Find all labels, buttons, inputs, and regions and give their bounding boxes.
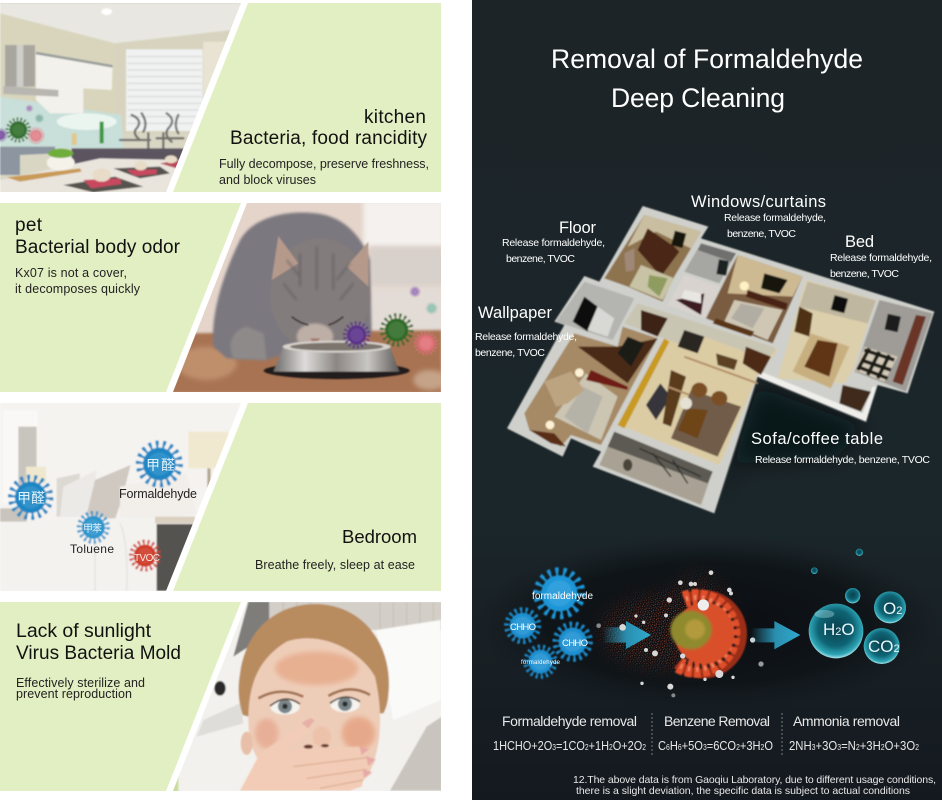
dark background xyxy=(472,0,942,800)
title line 1: Removal of Formaldehyde xyxy=(551,44,863,74)
panel: kitchen xyxy=(0,0,441,193)
label: formaldehyde small: formaldehyde xyxy=(521,660,561,666)
label: floor heading: Floor xyxy=(559,219,596,237)
panel: bedroom xyxy=(0,400,441,593)
hallway and living room xyxy=(618,303,778,465)
callout: sofa and coffee table xyxy=(751,430,930,466)
icon: white particles xyxy=(596,570,764,697)
icon: decomposing red virus xyxy=(670,595,742,673)
equation: benzene: C6H6+5O3=6CO2+3H2O xyxy=(658,738,773,753)
label: Formaldehyde: Formaldehyde xyxy=(119,487,197,501)
panel: pet xyxy=(0,200,447,393)
icon: arrow to water molecules xyxy=(751,621,800,649)
heading: formaldehyde removal: Formaldehyde removal xyxy=(502,713,637,729)
label: formaldehyde on virus: formaldehyde xyxy=(532,591,593,602)
callout: bed xyxy=(830,233,932,280)
icon: O2 bubble xyxy=(874,591,906,623)
kitchen room xyxy=(854,300,933,392)
icon: H2O bubble xyxy=(809,604,863,658)
floor room xyxy=(604,215,701,302)
heading: lack of sunlight: Lack of sunlight xyxy=(16,620,152,642)
second bedroom xyxy=(706,255,803,343)
text: pet description: Kx07 is not a cover, xyxy=(15,266,127,280)
column: formaldehyde removal xyxy=(493,713,646,753)
callout: windows and curtains xyxy=(691,193,826,240)
equation: ammonia: 2NH3+3O3=N2+3H2O+3O2 xyxy=(789,738,919,753)
green text panel: lack of sunlight xyxy=(0,602,241,791)
text: wallpaper description: benzene, TVOC xyxy=(475,347,545,359)
text: bed description: benzene, TVOC xyxy=(830,268,899,280)
green text panel: pet xyxy=(0,203,241,392)
footnote: there is a slight deviation, the specific data is subject to actual conditions xyxy=(576,785,910,797)
text: bed description: Release formaldehyde, xyxy=(830,252,932,264)
column: benzene removal xyxy=(658,713,773,753)
balcony xyxy=(599,432,713,505)
text: wallpaper description: Release formaldehyde, xyxy=(475,331,577,343)
alcove xyxy=(839,385,871,412)
green text panel: kitchen xyxy=(173,3,441,192)
text: windows description: benzene, TVOC xyxy=(727,228,796,240)
text: kitchen description: Fully decompose, preserve freshness, xyxy=(219,157,429,171)
photo: cat eating xyxy=(167,200,447,393)
photo: woman covering her nose xyxy=(166,600,443,793)
label: 甲醛 top virus: 甲醛 xyxy=(146,457,175,473)
heading: benzene removal: Benzene Removal xyxy=(664,713,770,729)
green text panel: bedroom xyxy=(173,403,441,591)
callout: floor xyxy=(502,219,605,265)
column: ammonia removal xyxy=(789,713,919,753)
text: bedroom description: Breathe freely, sleep at ease xyxy=(255,558,415,572)
wallpaper room xyxy=(556,282,634,340)
label: CHHO right: CHHO xyxy=(562,638,588,649)
label: 甲醛 left virus: 甲醛 xyxy=(17,490,45,506)
photo: kitchen interior xyxy=(0,0,247,193)
icon: blue pollutant viruses xyxy=(506,570,591,677)
text: sunlight description: prevent reproduction xyxy=(16,687,132,701)
title line 2: Deep Cleaning xyxy=(611,83,785,113)
footnote: 12.The above data is from Gaoqiu Laboratory, due to different usage conditions, xyxy=(573,774,936,786)
panel: dark removal of formaldehyde poster xyxy=(472,0,942,800)
label: sofa/coffee table heading: Sofa/coffee table xyxy=(751,430,883,448)
heading: pet: pet xyxy=(15,215,43,236)
isometric floor plan xyxy=(507,206,934,513)
heading: bacteria, food rancidity: Bacteria, food rancidity xyxy=(230,128,428,149)
label: wallpaper heading: Wallpaper xyxy=(478,304,552,322)
dining room xyxy=(778,280,876,388)
label: bed heading: Bed xyxy=(845,233,874,251)
label: windows/curtains heading: Windows/curtains xyxy=(691,193,826,211)
label: TVOC virus: TVOC xyxy=(134,553,160,564)
left bedroom xyxy=(524,327,658,447)
heading: ammonia removal: Ammonia removal xyxy=(793,713,900,729)
text: floor description: benzene, TVOC xyxy=(506,253,575,265)
label: 甲苯 virus: 甲苯 xyxy=(83,522,102,535)
text: sofa description: Release formaldehyde, benzene, TVOC xyxy=(755,454,930,466)
diagram: pollutant decomposition xyxy=(503,548,906,698)
heading: bacterial body odor: Bacterial body odor xyxy=(15,237,181,258)
equation: formaldehyde: 1HCHO+2O3=1CO2+1H2O+2O2 xyxy=(493,738,646,753)
label: CHHO left: CHHO xyxy=(510,622,536,633)
label: CO2: CO2 xyxy=(868,637,900,656)
heading: bedroom: Bedroom xyxy=(342,526,417,547)
closet and bath rooms xyxy=(668,243,736,318)
text: pet description: it decomposes quickly xyxy=(15,282,141,296)
icon: small bubbles xyxy=(811,549,863,603)
label: O2: O2 xyxy=(883,599,902,618)
photo: sofa with pollutant viruses xyxy=(0,400,247,593)
label: H2O: H2O xyxy=(823,620,855,639)
text: sunlight description: Effectively sterilize and xyxy=(16,676,145,690)
heading: virus bacteria mold: Virus Bacteria Mold xyxy=(16,643,181,664)
icon: arrow to red virus xyxy=(603,621,651,649)
heading: kitchen: kitchen xyxy=(364,107,426,128)
panel: lack of sunlight xyxy=(0,600,443,793)
icon: CO2 bubble xyxy=(864,628,900,664)
text: windows description: Release formaldehyde, xyxy=(724,212,826,224)
icon: dispersing red particles xyxy=(588,562,743,682)
label: Toluene: Toluene xyxy=(70,542,114,556)
text: floor description: Release formaldehyde, xyxy=(502,237,605,249)
callout: wallpaper xyxy=(475,304,577,359)
text: kitchen description: and block viruses xyxy=(219,173,316,187)
